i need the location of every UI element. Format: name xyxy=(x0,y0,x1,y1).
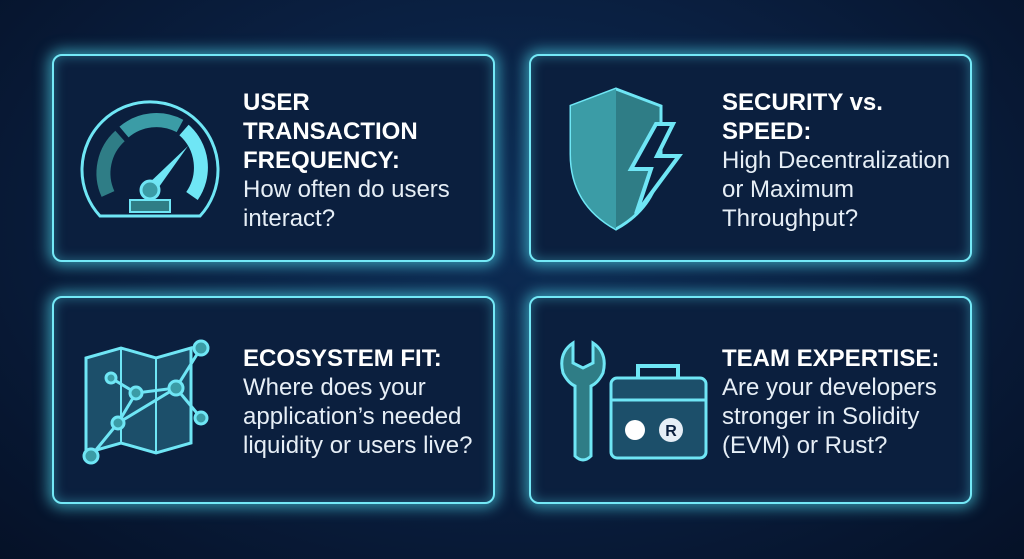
icon: shield with lightning xyxy=(570,87,683,231)
text: SECURITY vs. SPEED: xyxy=(722,89,883,145)
panel: ecosystem fit xyxy=(52,296,495,504)
text: How often do users interact? xyxy=(243,176,450,232)
panel: team expertise xyxy=(529,296,972,504)
icon: speedometer xyxy=(80,100,220,218)
icon: wrench and toolbox: R xyxy=(665,423,677,440)
panel: user transaction frequency xyxy=(52,54,495,262)
panel: security vs speed xyxy=(529,54,972,262)
text: High Decentralization or Maximum Throughput? xyxy=(722,147,950,232)
icon: map network xyxy=(82,340,210,464)
text: ECOSYSTEM FIT: xyxy=(243,345,442,372)
text: USER TRANSACTION FREQUENCY: xyxy=(243,89,418,174)
text: Where does your application’s needed liquidity or users live? xyxy=(243,374,472,459)
text xyxy=(722,89,950,232)
text: Are your developers stronger in Solidity (EVM) or Rust? xyxy=(722,374,937,459)
text: TEAM EXPERTISE: xyxy=(722,345,939,372)
icon: wrench and toolbox xyxy=(560,340,708,462)
text xyxy=(243,89,450,232)
